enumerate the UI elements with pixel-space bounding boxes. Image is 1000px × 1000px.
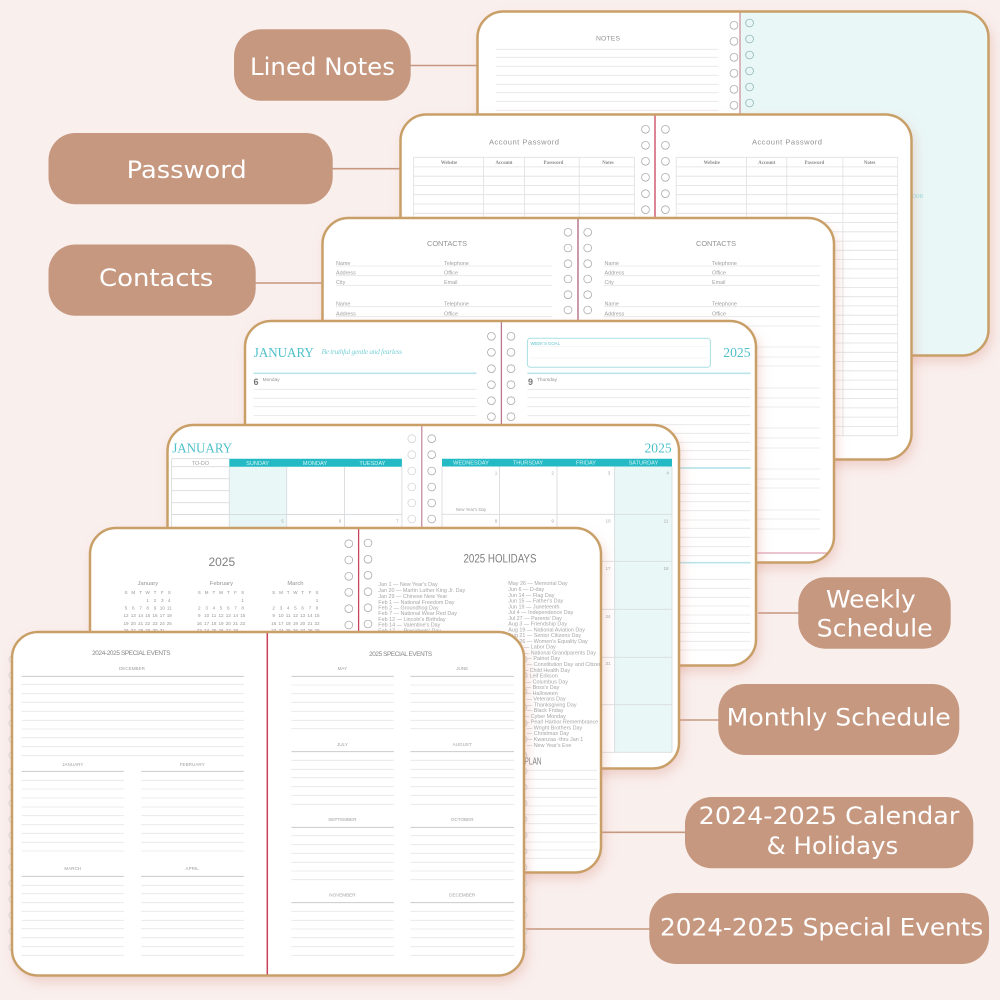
contact fields left: City <box>336 280 346 286</box>
holiday list: left column: Jan 20 — Martin Luther King Jr. Day <box>378 588 465 594</box>
holiday list: left column: Jan 29 — Chinese New Year <box>378 594 447 600</box>
date numbers: 8 <box>495 518 498 524</box>
mini calendar: march: 1 <box>316 598 319 603</box>
mini calendar: february: 11 <box>212 613 217 618</box>
mini calendar: january: S <box>124 590 128 595</box>
contact fields left: Address <box>336 311 356 317</box>
mini calendar: january: 22 <box>145 621 151 626</box>
holiday list: left column: Feb 1 — National Freedom Day <box>378 600 455 606</box>
mini calendar: february: T <box>227 590 230 595</box>
month labels: DECEMBER <box>449 892 476 898</box>
mini calendar: january: S <box>168 590 171 595</box>
mini calendar: february: S <box>198 590 201 595</box>
teal header bands <box>229 459 672 467</box>
contact fields right: City <box>604 280 614 286</box>
ruled lines <box>22 684 244 955</box>
month labels: JUNE <box>456 666 468 671</box>
date numbers: 10 <box>605 518 611 524</box>
table: right password grid <box>676 157 898 436</box>
mini calendar: january: 20 <box>131 621 136 626</box>
holiday list: left column: Feb 2 — Groundhog Day <box>378 606 439 612</box>
date numbers: 17 <box>605 566 611 571</box>
mini calendar: january: 16 <box>152 613 158 618</box>
date numbers: 3 <box>608 470 611 476</box>
plan ruled lines <box>500 770 597 858</box>
label: special events <box>649 893 989 964</box>
binder rings <box>730 19 753 109</box>
label: password: Password <box>127 156 247 184</box>
date numbers: New Year's Day <box>456 507 487 512</box>
ruled lines right page <box>291 685 514 955</box>
mini calendar: february: 5 <box>220 606 223 610</box>
mini calendar: january: 9 <box>154 606 157 610</box>
binder rings <box>408 435 436 523</box>
connector: password <box>332 168 401 170</box>
month labels: AUGUST <box>453 742 472 747</box>
section top rules <box>22 676 514 903</box>
mini calendar: february: F <box>234 590 237 595</box>
mini calendar: march: 28 <box>307 628 313 633</box>
holiday list: right column: Sep 17 — Constitution Day and Citizenship Day <box>508 662 623 668</box>
holiday list: right column: Jun 15 — Father's Day <box>508 598 564 604</box>
mini calendar: january: T <box>139 590 142 595</box>
mini calendar: march: 13 <box>300 613 306 618</box>
mini calendar: january: 24 <box>160 621 165 626</box>
ruled lines <box>254 389 751 650</box>
panel: weekly schedule page <box>245 321 756 666</box>
connector: contacts <box>255 282 323 284</box>
day labels: 9 <box>528 377 533 387</box>
holiday list: left column: Feb 7 — National Wear Red Day <box>378 611 457 617</box>
label: calendar and holidays: & Holidays <box>767 832 898 860</box>
contact fields right: Address <box>604 270 625 276</box>
date numbers: 6 <box>339 518 342 524</box>
mini calendar: january: 18 <box>167 613 172 618</box>
panel: calendar and holidays page <box>90 528 623 872</box>
mini calendar: january: 31 <box>160 628 165 633</box>
mini calendar: january: 25 <box>167 621 172 626</box>
week's goal box <box>527 338 710 367</box>
weekday labels: MONDAY <box>303 461 327 467</box>
contact fields left <box>336 261 469 317</box>
mini calendar: february: T <box>212 590 215 595</box>
holiday list: right column: May 26 — Memorial Day <box>508 581 568 587</box>
mini calendar: january: 14 <box>138 613 144 618</box>
mini calendar: january: 30 <box>152 628 158 633</box>
heading: contacts right: CONTACTS <box>696 239 736 248</box>
connector: lined notes <box>410 64 478 66</box>
mini calendar: march: 20 <box>300 621 306 626</box>
holiday list: right column: Aug 21 — Senior Citizens Day <box>508 633 581 639</box>
month labels: MARCH <box>64 866 81 871</box>
table: left password grid: Notes <box>602 161 614 166</box>
holiday list: right column: Nov 11 — Veterans Day <box>508 697 566 703</box>
mini calendar: february: 6 <box>227 606 230 610</box>
holiday list: right column: Oct 9 — Leif Erikson <box>508 674 558 680</box>
panel: password page <box>400 114 912 460</box>
holiday list: right column: Dec 26 — Kwanzaa -thru Jan 1 <box>508 737 583 743</box>
mini calendar: february: 3 <box>205 606 208 610</box>
holiday list: left column: Jan 1 — New Year's Day <box>378 582 438 588</box>
mini calendar: january: 17 <box>160 613 165 618</box>
weekday labels: TO-DO <box>192 461 209 467</box>
weekday labels: WEDNESDAY <box>453 461 489 467</box>
contact fields left: Office <box>444 270 458 276</box>
label: contacts: Contacts <box>99 264 213 292</box>
contact fields right: Email <box>712 280 725 286</box>
year: 2025 <box>644 442 672 456</box>
mini calendar: march: March <box>287 581 303 587</box>
table: right password grid: Password <box>805 161 825 166</box>
mini calendar: january <box>123 581 172 633</box>
month labels: JULY <box>337 742 348 747</box>
mini calendar: january: 2 <box>154 598 157 603</box>
label: lined notes <box>234 29 411 101</box>
month labels: APRIL <box>186 866 199 871</box>
table: right password grid: Website <box>704 161 720 166</box>
tagline: Be truthful gentle and fearless <box>322 347 402 356</box>
mini calendar: march: 19 <box>293 621 298 626</box>
connector: weekly schedule <box>758 612 799 614</box>
mini calendar: january: 7 <box>139 606 142 610</box>
heading: january: JANUARY <box>254 345 314 360</box>
mini calendar: january: M <box>131 590 135 595</box>
holiday list: right column: Jul 4 — Independence Day <box>508 610 574 616</box>
fragment of teal text: OUR <box>912 194 924 200</box>
mini calendar: february: S <box>241 590 244 595</box>
mini calendar: february: M <box>205 590 209 595</box>
holiday list: right column: Sep 1 — Labor Day <box>508 645 556 651</box>
binder rings <box>564 228 592 314</box>
mini calendar: march: T <box>287 590 290 595</box>
mini calendar: march: 3 <box>280 606 283 610</box>
holiday list: right column: Dec 1 — Cyber Monday <box>508 714 566 720</box>
mini calendar: march: 2 <box>272 606 275 610</box>
teal section rules <box>254 373 751 563</box>
label: password <box>48 133 333 204</box>
month labels: JANUARY <box>62 762 83 767</box>
mini calendar: february: 17 <box>204 621 210 626</box>
mini calendar: march: S <box>272 590 275 595</box>
holiday list: right column: Sep 11 — Patriot Day <box>508 656 560 662</box>
contact form lines <box>336 266 820 529</box>
mini calendar: march: 12 <box>293 613 298 618</box>
date numbers: 7 <box>396 518 399 524</box>
ruled lines <box>496 49 718 110</box>
mini calendar: march: 9 <box>272 613 275 618</box>
label: calendar and holidays <box>685 797 973 868</box>
contact fields left: Name <box>336 261 350 267</box>
weekday labels: TUESDAY <box>359 461 386 467</box>
mini calendar: march: 6 <box>301 606 304 610</box>
mini calendar: march: 11 <box>286 613 291 618</box>
table: left password grid: Account <box>495 161 513 166</box>
holiday list: right column: Oct 16 — Boss's Day <box>508 685 560 691</box>
mini calendar: march: S <box>315 590 319 595</box>
heading: account password right: Account Password <box>752 138 822 146</box>
label: weekly schedule: Schedule <box>817 615 933 643</box>
contact fields left: Name <box>336 302 350 308</box>
heading: contacts left: CONTACTS <box>427 239 467 248</box>
year: 2025 <box>723 346 750 361</box>
holiday list: right column: Aug 26 — Women's Equality Day <box>508 639 588 645</box>
weekday labels: FRIDAY <box>576 461 596 467</box>
binder rings <box>642 125 669 214</box>
mini calendar: february: 26 <box>218 628 224 633</box>
contact fields left: Email <box>444 280 457 286</box>
mini calendar: march: F <box>309 590 312 595</box>
panel: contacts page <box>322 218 834 562</box>
mini calendar: march: T <box>301 590 304 595</box>
label: calendar and holidays: 2024-2025 Calendar <box>699 802 959 830</box>
holiday list: right column: Aug 19 — National Aviation Day <box>508 627 585 633</box>
holiday list: right column: Jul 27 — Parents' Day <box>508 616 562 622</box>
mini calendar: march: 29 <box>314 628 320 633</box>
mini calendar: march: 7 <box>309 606 312 610</box>
mini calendar: february: 12 <box>218 613 224 618</box>
mini calendar: february: February <box>210 581 233 587</box>
holiday list: right column: Sep 7 — National Grandparents Day <box>508 650 596 656</box>
mini calendar: march: 23 <box>271 628 277 633</box>
mini calendar: january: 10 <box>160 606 165 610</box>
month labels: FEBRUARY <box>180 762 205 767</box>
date numbers <box>281 470 669 666</box>
panel: monthly schedule page <box>168 425 679 768</box>
contact fields right: Name <box>604 261 619 267</box>
connector: monthly schedule <box>680 719 719 721</box>
month labels: DECEMBER <box>119 666 146 671</box>
mini calendar: january: F <box>161 590 164 595</box>
connector: special events <box>524 928 650 930</box>
mini calendar: february: 19 <box>218 621 224 626</box>
mini calendar: january: 3 <box>161 598 164 603</box>
mini calendar: january: T <box>154 590 157 595</box>
mini calendar: february: 15 <box>240 613 246 618</box>
mini calendar: march <box>271 581 320 633</box>
label: lined notes: Lined Notes <box>250 53 395 81</box>
day labels: 6 <box>253 377 259 387</box>
weekend column tints <box>229 466 672 752</box>
panel: lined notes page <box>478 11 990 357</box>
mini calendar: january: 21 <box>138 621 144 626</box>
holiday list: right column: Dec 7 — Pearl Harbor Remembrance <box>508 720 598 726</box>
mini calendar: january: 23 <box>152 621 158 626</box>
label: contacts <box>48 244 256 316</box>
mini calendar: march: M <box>279 590 283 595</box>
heading: notes: NOTES <box>596 36 620 42</box>
connector: calendar and holidays <box>602 831 686 833</box>
heading: account password left: Account Password <box>489 138 559 146</box>
holiday list: right column: Oct 13 — Columbus Day <box>508 679 568 685</box>
mini calendar: february: 4 <box>213 606 216 610</box>
day labels: Thursday <box>537 377 558 383</box>
holiday list: right column: Jun 6 — D-day <box>508 587 545 593</box>
day labels: Monday <box>263 377 280 383</box>
month labels: OCTOBER <box>451 817 474 822</box>
mini calendar: march: 5 <box>294 606 297 610</box>
mini calendar: january: 28 <box>138 628 144 633</box>
mini calendar: february: 2 <box>198 606 201 610</box>
contact fields left: Telephone <box>444 261 469 267</box>
heading: 2024-2025 special events: 2024-2025 SPECIAL EVENTS <box>92 650 171 657</box>
mini calendar: january: January <box>138 581 158 587</box>
holiday list: right column: Aug 3 — Friendship Day <box>508 622 567 628</box>
mini calendar: february: 21 <box>233 621 238 626</box>
label: monthly schedule <box>718 684 959 755</box>
panel: special events page <box>9 632 527 976</box>
mini calendar: march: W <box>293 590 298 595</box>
holiday list: right column: Nov 27 — Thanksgiving Day <box>508 702 577 708</box>
label: weekly schedule: Weekly <box>826 585 916 613</box>
mini calendar: january: 11 <box>167 606 172 610</box>
date numbers: 1 <box>495 470 498 476</box>
date numbers: 11 <box>664 518 669 524</box>
date numbers: 24 <box>605 614 611 619</box>
mini calendar: february: W <box>219 590 224 595</box>
contact fields right: Telephone <box>712 302 737 308</box>
date numbers: 4 <box>666 470 669 476</box>
mini calendar: february: 23 <box>197 628 202 633</box>
heading: 2025: 2025 <box>208 555 235 569</box>
mini calendar: february: 1 <box>241 598 244 603</box>
contact fields right: Office <box>712 270 726 276</box>
mini calendar: february: 10 <box>204 613 210 618</box>
mini calendar: january: 4 <box>168 598 171 603</box>
holiday list: right column: Dec 25 — Christmas Day <box>508 731 569 737</box>
contact fields right <box>604 261 737 317</box>
mini calendar: february: 25 <box>211 628 217 633</box>
weekday labels: THURSDAY <box>513 461 543 467</box>
weekday labels: SATURDAY <box>629 461 658 467</box>
mini calendar: february: 20 <box>226 621 231 626</box>
edge perforations <box>9 656 527 950</box>
mini calendar: january: 26 <box>123 628 129 633</box>
mini calendar: january: 6 <box>132 606 135 610</box>
mini calendar: february: 14 <box>233 613 238 618</box>
contact fields right: Address <box>604 311 625 317</box>
date numbers: 2 <box>551 470 554 476</box>
mini calendar: march: 26 <box>293 628 298 633</box>
contact fields right: Telephone <box>712 261 737 267</box>
holiday list: right column: Dec 17 — Wright Brothers Day <box>508 726 583 732</box>
mini calendar: february: 28 <box>233 628 238 633</box>
mini calendar: march: 24 <box>278 628 284 633</box>
holiday list: left column: Feb 17 — Presidents' Day <box>378 628 441 634</box>
mini calendar: february: 18 <box>211 621 217 626</box>
table: right password grid: Notes <box>864 161 875 166</box>
calendar grid <box>172 459 672 752</box>
month labels <box>62 666 476 898</box>
month labels: MAY <box>338 666 347 671</box>
date numbers: 5 <box>281 518 284 524</box>
weekday labels: SUNDAY <box>246 461 269 467</box>
date numbers: 9 <box>551 518 554 524</box>
mini calendar: march: 14 <box>307 613 313 618</box>
mini calendar: march: 4 <box>287 606 290 610</box>
mini calendar: january: 12 <box>123 613 129 618</box>
holiday list: right column: Nov 28 — Black Friday <box>508 708 564 714</box>
mini calendar: february: 22 <box>240 621 246 626</box>
date numbers: 18 <box>663 566 669 571</box>
mini calendar: march: 18 <box>286 621 291 626</box>
binder rings <box>488 332 515 421</box>
mini calendar: january: W <box>146 590 151 595</box>
contact fields left: Office <box>444 311 458 317</box>
table: right password grid: Account <box>758 161 776 166</box>
heading: plan: PLAN <box>524 756 542 768</box>
mini calendar: february <box>197 581 246 633</box>
holiday list: right column: Dec 31 — New Year's Eve <box>508 743 571 749</box>
label: special events: 2024-2025 Special Events <box>660 914 983 942</box>
label: monthly schedule: Monthly Schedule <box>727 704 951 732</box>
mini calendar: february: 7 <box>234 606 237 610</box>
heading: 2025 holidays: 2025 HOLIDAYS <box>464 552 536 566</box>
heading: 2025 special events: 2025 SPECIAL EVENTS <box>369 651 432 658</box>
weekday labels <box>192 460 658 465</box>
mini calendar: march: 8 <box>316 606 319 610</box>
mini calendar: january: 19 <box>123 621 129 626</box>
mini calendar: february: 8 <box>241 606 244 610</box>
contact fields left: Address <box>336 270 356 276</box>
mini calendar: january: 13 <box>131 613 136 618</box>
mini calendar: march: 10 <box>278 613 284 618</box>
month labels: NOVEMBER <box>329 892 356 898</box>
mini calendar: january: 5 <box>125 606 128 610</box>
table: left password grid: Password <box>544 161 564 166</box>
holiday list: left column: Feb 14 — Valentine's Day <box>378 623 441 629</box>
contact fields left: Telephone <box>444 302 469 308</box>
mini calendar: march: 27 <box>300 628 306 633</box>
mini calendar: january: 15 <box>145 613 151 618</box>
holiday list: left column: Feb 12 — Lincoln's Birthday <box>378 617 446 623</box>
holiday list: right column: Oct 6 — Child Health Day <box>508 668 570 674</box>
mini calendar: january: 27 <box>131 628 136 633</box>
holiday list: left column <box>378 582 465 634</box>
mini calendar: january: 8 <box>146 606 149 610</box>
holiday list: right column: Oct 31 — Halloween <box>508 691 558 697</box>
table: left password grid: Website <box>441 161 457 166</box>
holiday list: right column: Jun 14 — Flag Day <box>508 593 555 599</box>
mini calendar: march: 17 <box>278 621 284 626</box>
contact fields right: Name <box>604 302 619 308</box>
day labels <box>254 378 557 385</box>
mini calendar: february: 16 <box>197 621 202 626</box>
week's goal box: WEEK'S GOAL <box>530 341 561 346</box>
label: weekly schedule <box>798 577 951 649</box>
mini calendar: march: 15 <box>314 613 320 618</box>
mini calendar: march: 21 <box>307 621 313 626</box>
mini calendar: january: 29 <box>145 628 151 633</box>
holiday list: right column: Jun 19 — Juneteenth <box>508 604 560 610</box>
mini calendar: january: 1 <box>146 598 149 603</box>
heading: january: JANUARY <box>172 441 232 456</box>
contact fields right: Office <box>712 311 726 317</box>
date numbers: 31 <box>605 661 611 666</box>
mini calendar: february: 13 <box>226 613 231 618</box>
mini calendar: march: 22 <box>314 621 320 626</box>
month labels: SEPTEMBER <box>328 817 357 822</box>
binder rings <box>345 539 372 629</box>
mini calendar: march: 25 <box>286 628 291 633</box>
holiday list: right column <box>508 581 623 749</box>
mini calendar: march: 16 <box>271 621 277 626</box>
mini calendar: february: 27 <box>226 628 231 633</box>
table: left password grid <box>414 157 635 220</box>
mini calendar: february: 9 <box>198 613 201 618</box>
mini calendar: february: 24 <box>204 628 210 633</box>
